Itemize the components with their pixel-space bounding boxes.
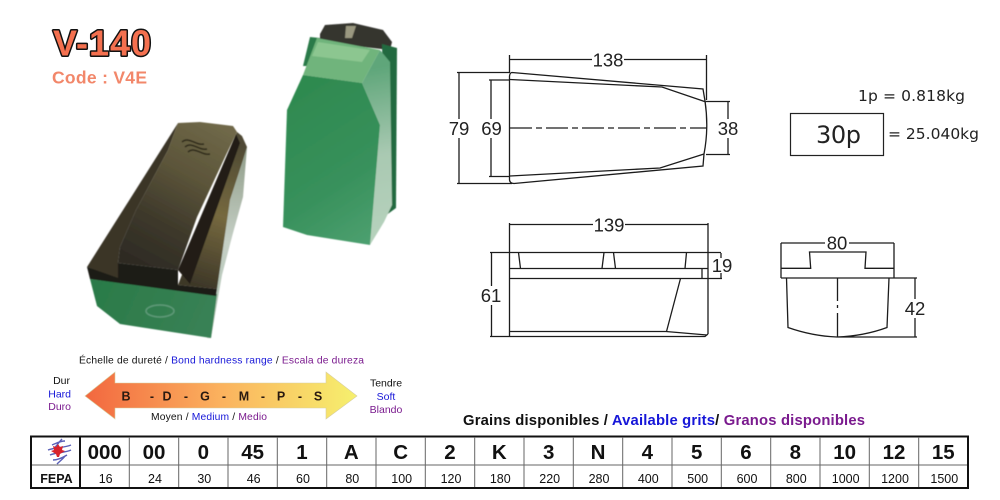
soft label: [370, 378, 403, 416]
dark cap: [320, 23, 392, 50]
back rails: [303, 37, 320, 66]
ridge engraving: [182, 140, 210, 154]
hard label: Dur: [53, 375, 71, 387]
centre line: [510, 127, 707, 129]
grit codes: N: [591, 441, 605, 464]
FEPA values: [40, 472, 958, 486]
hardness grades: -: [261, 390, 265, 404]
dimension 19: 19: [712, 255, 732, 276]
dimension 138: [510, 50, 706, 100]
FEPA values: 30: [197, 472, 211, 486]
photo: segment top view: [87, 122, 247, 338]
grit codes: 5: [691, 441, 702, 464]
base lines: [490, 278, 708, 336]
hardness grades: -: [150, 390, 154, 404]
grit codes: 10: [833, 441, 856, 464]
grits heading: Grains disponibles / Available grits/ Granos disponibles: [463, 413, 865, 429]
FEPA values: 120: [441, 472, 461, 486]
FEPA values: 1500: [930, 472, 958, 486]
plan view drawing: [449, 50, 738, 184]
centre line: [836, 278, 838, 337]
outline: [510, 72, 707, 184]
FEPA values: 100: [391, 472, 412, 486]
dimension 38: 38: [718, 118, 738, 139]
side view drawing: [481, 214, 732, 337]
FEPA values: 280: [589, 472, 609, 486]
upper bevel face: [303, 38, 380, 83]
grit table: [31, 436, 968, 488]
side face: [362, 50, 392, 245]
dimension 80: 80: [827, 232, 847, 254]
ridge trapezoid edges: [518, 252, 686, 268]
icon: company logo: [48, 439, 71, 464]
grit codes: 8: [790, 441, 801, 464]
grit codes: [88, 441, 955, 464]
FEPA values: 500: [687, 472, 708, 486]
body: [786, 278, 917, 337]
ridge top: [118, 122, 237, 270]
weight box: 30p: [816, 121, 861, 149]
dimension 79: 79: [449, 118, 469, 139]
green face mark: [146, 305, 174, 317]
hardness grades: -: [184, 390, 188, 404]
grit codes: 2: [444, 441, 456, 464]
hardness grades: -: [222, 390, 226, 404]
green end face: [90, 279, 217, 338]
hard label: Duro: [48, 401, 71, 413]
FEPA values: 24: [148, 472, 162, 486]
grit codes: C: [393, 441, 408, 464]
dimension 42: 42: [905, 298, 925, 319]
dimension 69: [481, 80, 510, 176]
grit codes: 12: [883, 441, 905, 464]
grit codes: 15: [932, 441, 955, 464]
grit codes: 000: [88, 441, 122, 464]
FEPA values: 800: [786, 472, 807, 486]
hardness grades: [121, 390, 322, 404]
FEPA values: 600: [737, 472, 757, 486]
left rail: [87, 123, 178, 280]
product code: Code : V4E: [52, 68, 147, 88]
grit codes: 45: [241, 441, 264, 464]
FEPA values: 1200: [881, 472, 909, 486]
hardness grades: -: [298, 390, 302, 404]
medium label: Moyen / Medium / Medio: [151, 412, 267, 423]
dimension 69: 69: [481, 118, 502, 139]
soft label: Tendre: [370, 378, 402, 390]
weight box: [790, 114, 884, 156]
main green face: [283, 75, 380, 245]
hardness grades: M: [239, 390, 249, 404]
hardness arrow: [85, 372, 357, 419]
grit codes: 3: [543, 441, 554, 464]
rail shadow: [178, 134, 240, 284]
ridge front: [87, 263, 217, 296]
hard label: [48, 375, 71, 413]
cap reflection: [345, 26, 356, 38]
dimension 61: [481, 253, 501, 336]
FEPA values: 46: [247, 472, 261, 486]
soft label: Soft: [377, 391, 395, 403]
photo: segment bottom view: [283, 23, 397, 245]
FEPA values: 400: [638, 472, 659, 486]
FEPA values: 220: [539, 472, 560, 486]
hardness grades: D: [162, 390, 172, 404]
grit codes: K: [492, 441, 507, 464]
dimension 61: 61: [481, 285, 501, 306]
hardness grades: S: [314, 390, 322, 404]
FEPA values: 180: [490, 472, 511, 486]
body lines: [490, 223, 722, 337]
bevel highlight: [312, 42, 370, 62]
right rail: [178, 132, 247, 289]
grit codes: 0: [198, 441, 209, 464]
grit codes: 6: [740, 441, 752, 464]
dimension 139: 139: [594, 214, 624, 236]
total weight: = 25.040kg: [888, 125, 979, 143]
hardness grades: B: [121, 390, 131, 404]
hardness scale heading: Échelle de dureté / Bond hardness range / Escala de dureza: [79, 354, 364, 366]
FEPA values: 60: [296, 472, 310, 486]
dimension 79: [449, 72, 512, 184]
hardness grades: P: [277, 390, 285, 404]
FEPA values: FEPA: [40, 472, 73, 486]
dimension 138: 138: [593, 50, 623, 70]
grit codes: 00: [143, 441, 165, 464]
end view drawing: [781, 232, 925, 337]
white side face: [207, 147, 247, 338]
FEPA values: 80: [345, 472, 359, 486]
soft label: Blando: [370, 404, 403, 416]
hard label: Hard: [48, 388, 71, 400]
profile: [781, 243, 917, 278]
dimension 80: [781, 232, 894, 254]
grit codes: 1: [296, 441, 308, 464]
dimension 42: [905, 278, 925, 337]
grit codes: A: [344, 441, 359, 464]
title: V-140: [53, 22, 151, 64]
weight per unit: 1p = 0.818kg: [858, 87, 965, 105]
dimension 38: [706, 102, 738, 154]
hardness grades: G: [200, 390, 210, 404]
grit codes: 4: [642, 441, 654, 464]
FEPA values: 16: [99, 472, 113, 486]
FEPA values: 1000: [832, 472, 860, 486]
inner bevels: [510, 80, 706, 176]
